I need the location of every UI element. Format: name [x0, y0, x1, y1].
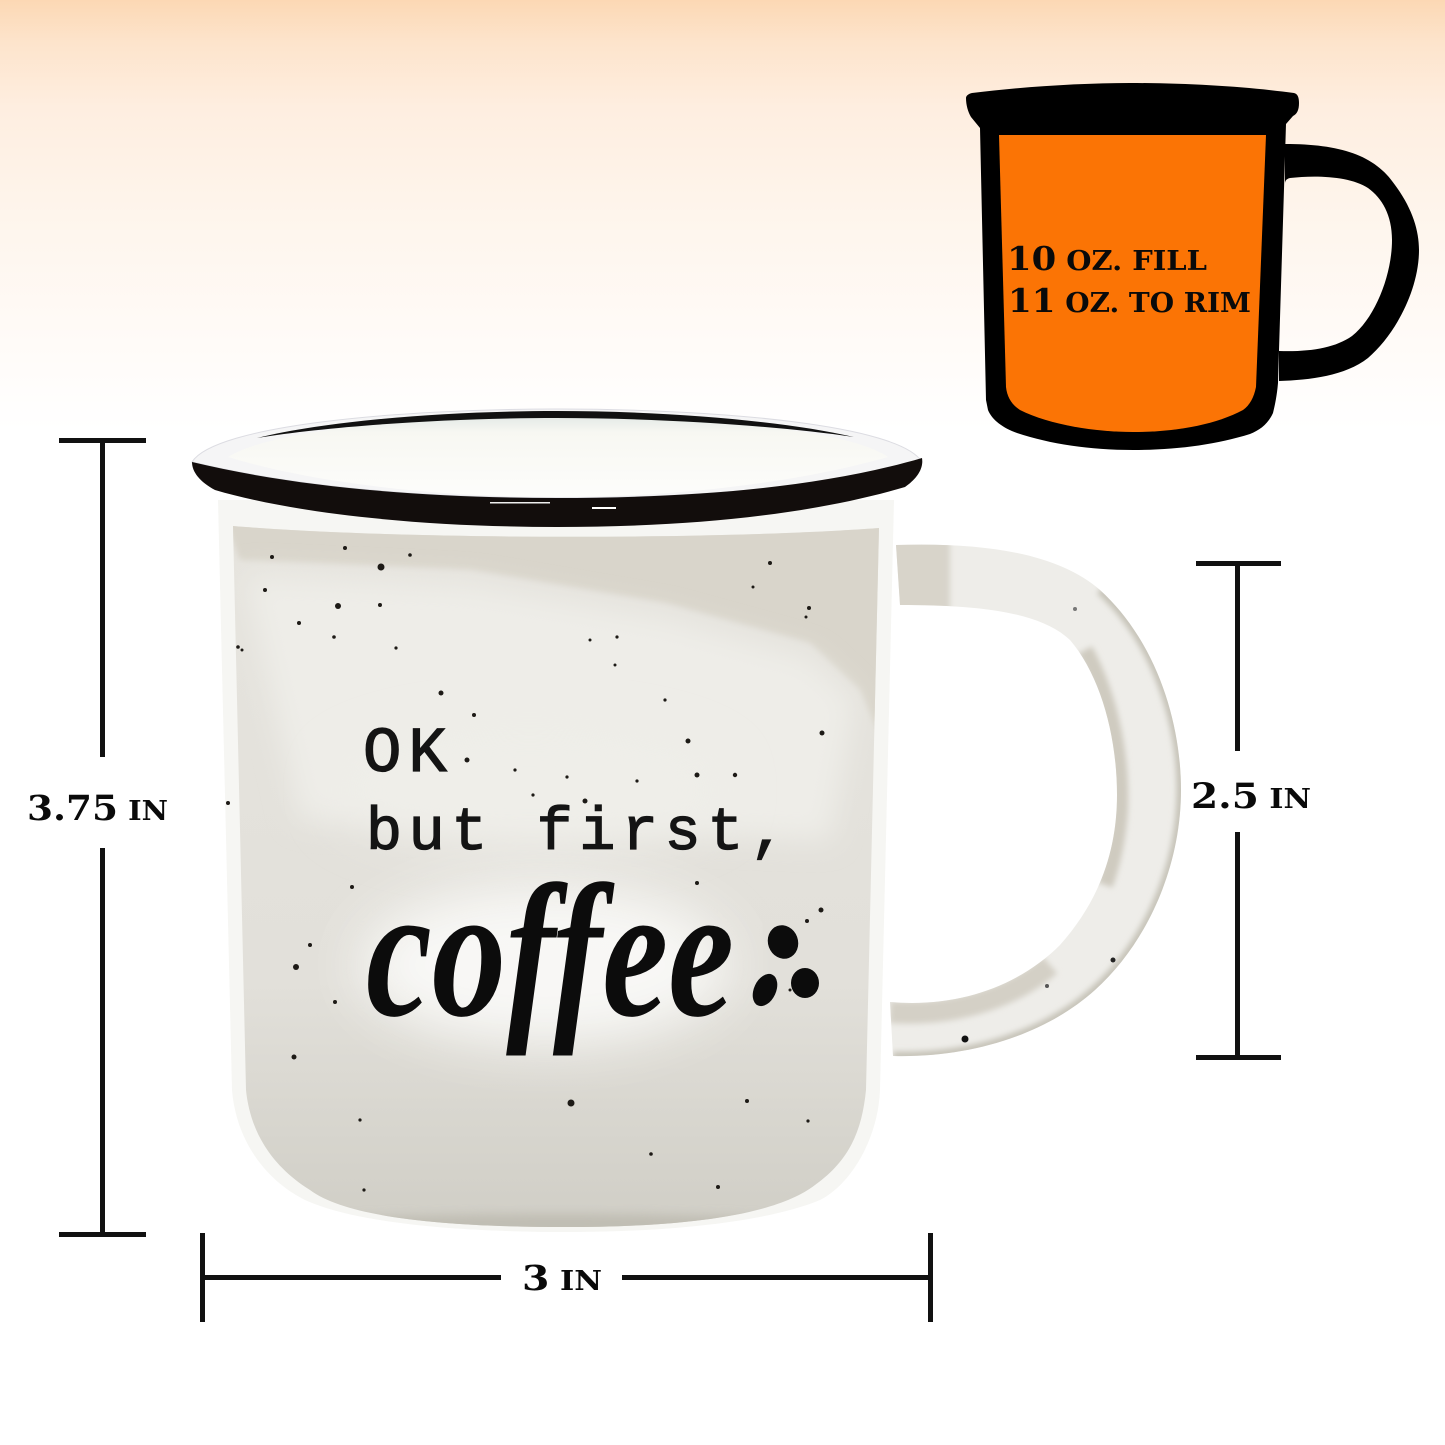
orange fill	[999, 135, 1266, 432]
handle height dimension: 2.5 in	[1191, 561, 1311, 1060]
label 2.5 in: 2.5 IN	[1191, 776, 1311, 817]
mug body	[218, 500, 894, 1234]
silhouette body	[966, 83, 1299, 450]
label 3 in: 3 IN	[522, 1258, 602, 1299]
silhouette handle	[1279, 144, 1419, 381]
speckles	[226, 546, 824, 1192]
height dimension: 3.75 in	[27, 438, 168, 1237]
capacity text line 2: 11 OZ. TO RIM	[1008, 281, 1251, 320]
mug text: but first,: but first,	[366, 800, 786, 868]
mug text: OK: OK	[363, 719, 454, 791]
mug photo	[192, 409, 1181, 1234]
mug handle	[885, 535, 1181, 1056]
capacity icon: mug silhouette	[966, 83, 1419, 450]
capacity text: 10 OZ. FILL	[1007, 239, 1207, 278]
mug rim	[192, 409, 922, 527]
icon: coffee beans	[748, 921, 819, 1010]
label 3.75 in: 3.75 IN	[27, 788, 168, 829]
mug text: coffee: coffee	[366, 847, 734, 1057]
width dimension: 3 in	[200, 1233, 933, 1322]
